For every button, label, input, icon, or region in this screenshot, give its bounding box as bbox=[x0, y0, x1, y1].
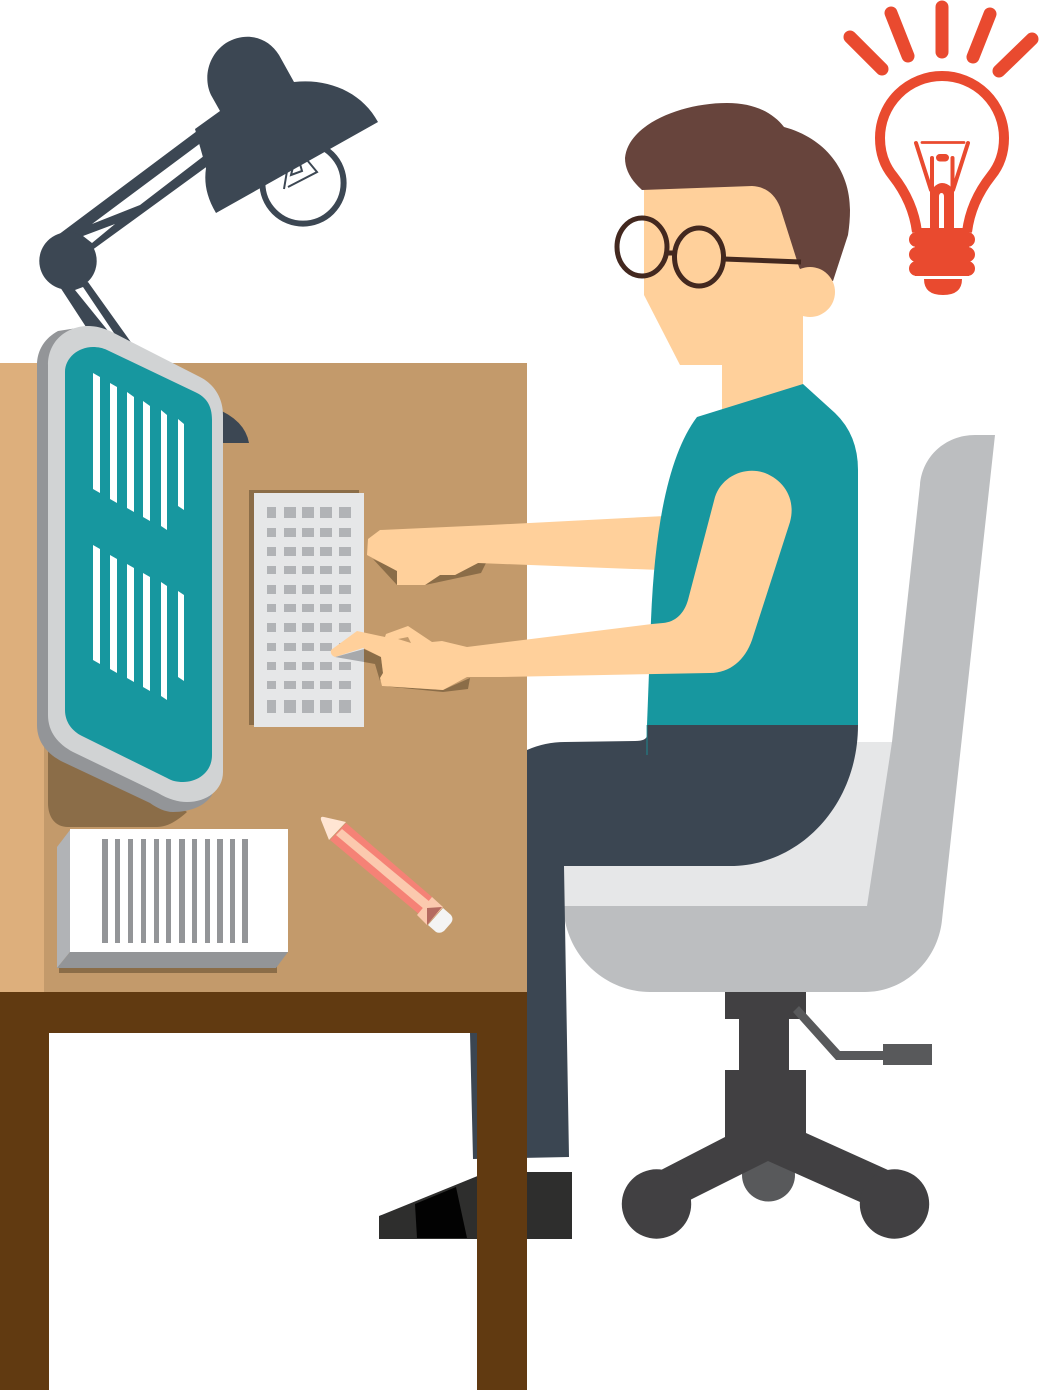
notebook bottom edge bbox=[57, 952, 288, 968]
chair centre wheel bbox=[742, 1148, 795, 1202]
office chair bbox=[564, 435, 995, 1239]
lamp base bbox=[200, 408, 249, 443]
shirt hem line bbox=[646, 725, 648, 755]
glasses bbox=[617, 218, 801, 286]
pencil bbox=[321, 817, 452, 933]
chair seat cushion bbox=[564, 742, 892, 906]
upper arm reaching to keyboard bbox=[367, 516, 665, 585]
pencil tip bbox=[321, 817, 346, 840]
notebook text lines bbox=[102, 839, 248, 943]
lower hand and forearm bbox=[331, 471, 792, 690]
keyboard shadow bbox=[249, 490, 359, 725]
shoe sole and upper bbox=[379, 1172, 572, 1239]
chair left wheel bbox=[622, 1169, 691, 1239]
desk surface left strip bbox=[0, 363, 44, 993]
screen text lines: lower column bbox=[93, 545, 184, 700]
light rays bbox=[850, 7, 1032, 71]
desk surface bbox=[0, 363, 527, 993]
keyboard plate bbox=[254, 493, 364, 727]
bulb tip bbox=[924, 279, 962, 295]
desk bbox=[0, 363, 527, 1390]
upper hand and forearm bbox=[367, 516, 665, 585]
lamp lower arm bbox=[60, 282, 133, 365]
gap between fingers bbox=[398, 637, 411, 643]
upper hand shadow bbox=[373, 559, 486, 585]
chair back and seat base bbox=[564, 435, 995, 992]
t-shirt bbox=[647, 384, 858, 725]
chair base bbox=[661, 992, 888, 1202]
monitor bezel bbox=[48, 326, 223, 802]
hair bbox=[625, 103, 850, 281]
desk lamp bbox=[39, 37, 378, 443]
ear bbox=[785, 267, 835, 317]
pencil eraser bbox=[428, 908, 452, 933]
lamp joint bbox=[39, 232, 97, 290]
pencil stripe bbox=[336, 829, 430, 909]
lower hand shadow on desk bbox=[364, 649, 470, 692]
icon: idea light bulb bbox=[850, 7, 1032, 295]
notebook page bbox=[70, 829, 288, 952]
monitor shadow on desk bbox=[48, 745, 187, 827]
trousers bbox=[470, 725, 858, 1159]
computer monitor bbox=[37, 326, 223, 827]
screen text lines: upper column bbox=[93, 373, 184, 530]
keyboard bbox=[249, 490, 364, 727]
notebook bbox=[57, 829, 288, 973]
lower arm reaching to keyboard bbox=[331, 471, 792, 692]
monitor screen bbox=[65, 347, 212, 782]
shoe bbox=[379, 1172, 572, 1239]
bulb filament bbox=[916, 142, 968, 230]
shoe dark stripe bbox=[415, 1187, 467, 1238]
lamp shade bbox=[195, 37, 378, 213]
monitor rear edge bbox=[37, 326, 212, 812]
keyboard keys bbox=[267, 507, 351, 713]
bulb screw base bbox=[909, 228, 975, 276]
lamp light bulb bbox=[262, 142, 344, 224]
man bbox=[331, 103, 858, 755]
bulb glass bbox=[880, 76, 1004, 232]
pencil ferrule band bbox=[427, 907, 442, 925]
pencil ferrule bbox=[417, 897, 443, 925]
lamp upper arm bbox=[58, 131, 209, 262]
chair right wheel bbox=[860, 1169, 929, 1239]
notebook side bbox=[57, 830, 70, 968]
pencil body bbox=[330, 823, 432, 915]
lower finger shadow on keyboard bbox=[335, 649, 364, 662]
desk frame and legs bbox=[0, 992, 527, 1390]
notebook shadow bbox=[59, 965, 277, 973]
chair height lever bbox=[793, 1006, 932, 1065]
neck and face bbox=[644, 180, 803, 420]
